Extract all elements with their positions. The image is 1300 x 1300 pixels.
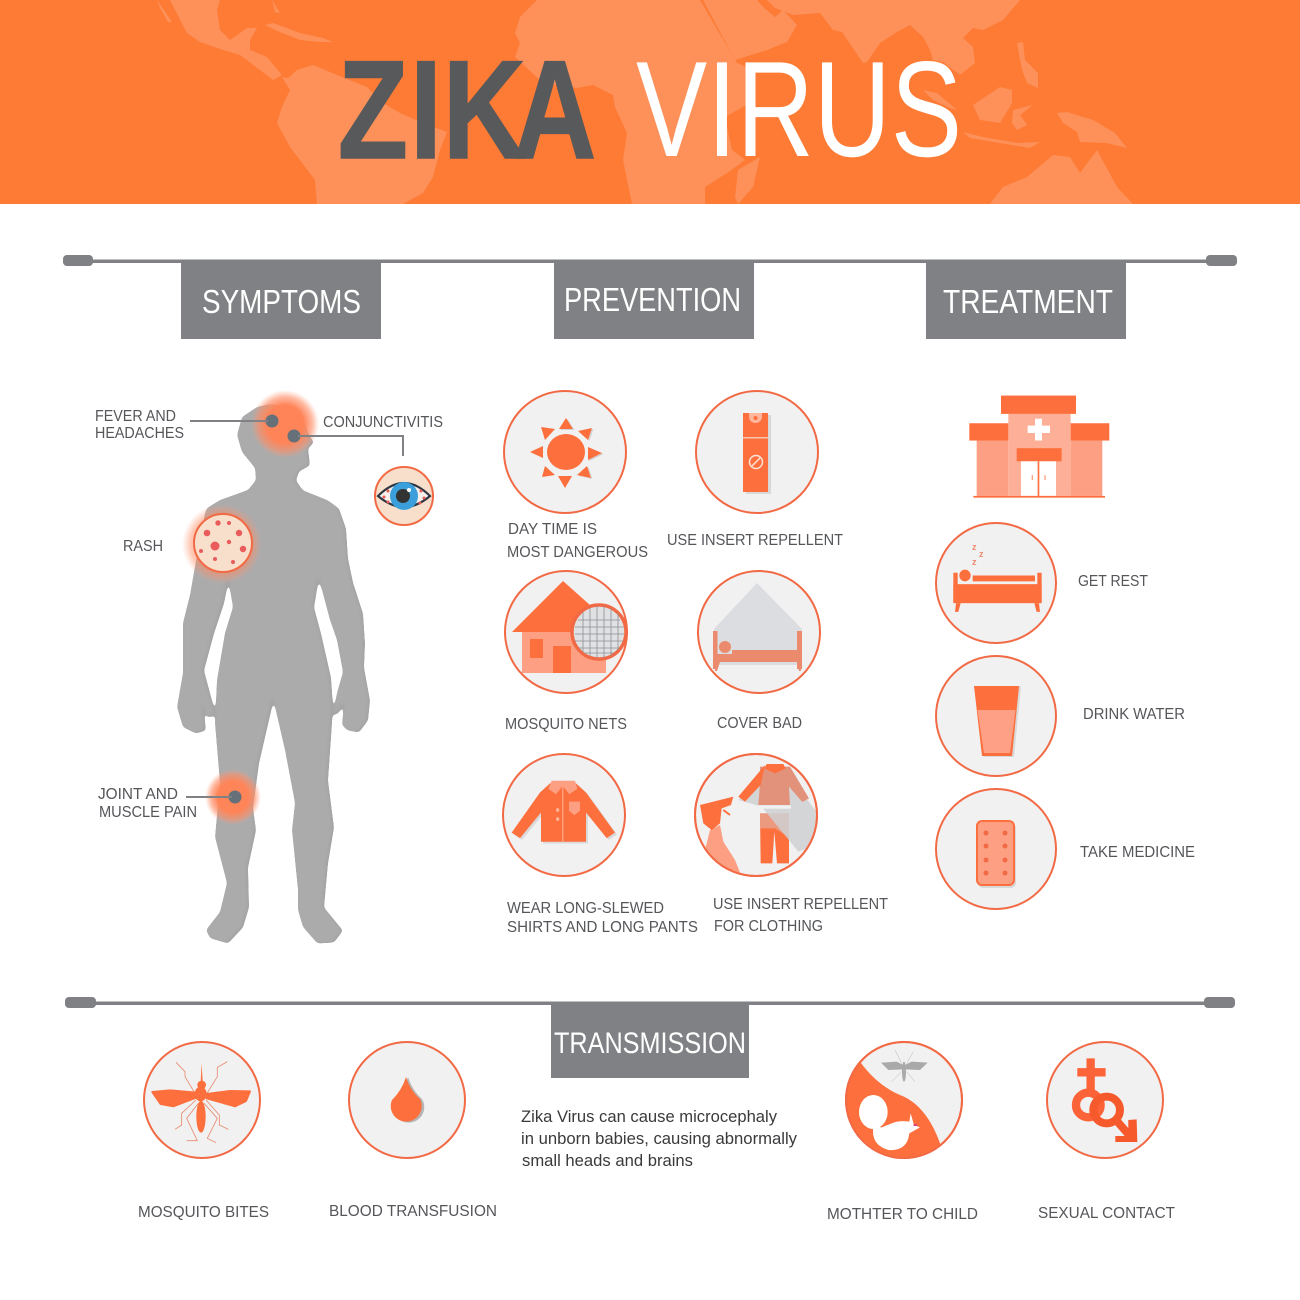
icon: sun [504, 391, 626, 513]
icon: bed rest: z [979, 549, 984, 559]
head pain glow [251, 390, 319, 458]
label: conjunctivitis: CONJUNCTIVITIS [323, 414, 443, 431]
icon: gender symbols [1047, 1042, 1163, 1158]
heading: treatment: TREATMENT [943, 283, 1113, 320]
top rail [63, 255, 1237, 266]
icon: eye [375, 467, 433, 525]
label: blood transfusion: BLOOD TRANSFUSION [329, 1203, 497, 1220]
label: fever and headaches [95, 408, 184, 442]
heading: symptoms: SYMPTOMS [202, 283, 361, 320]
label: day time: MOST DANGEROUS [507, 544, 648, 561]
label: day time [507, 521, 648, 561]
icon: long-sleeved shirt [503, 754, 625, 876]
label: fever and headaches: FEVER AND [95, 408, 176, 425]
label: wear long sleeves: WEAR LONG-SLEWED [507, 900, 664, 917]
icon: house with net [505, 571, 627, 693]
label: get rest: GET REST [1078, 573, 1148, 590]
label: fever and headaches: HEADACHES [95, 425, 184, 442]
bottom rail [65, 997, 1235, 1008]
title: ZIKA [338, 32, 596, 189]
label: sexual contact: SEXUAL CONTACT [1038, 1205, 1175, 1222]
label: repellent for clothing: USE INSERT REPELLENT [713, 896, 888, 913]
heading: treatment [926, 261, 1126, 339]
heading: prevention: PREVENTION [564, 281, 741, 318]
title [338, 32, 962, 189]
panel: symptoms [95, 390, 443, 944]
icon: hospital [969, 396, 1109, 498]
panel: prevention [503, 391, 888, 936]
panel: transmission [138, 1042, 1175, 1223]
icon: rash skin [182, 504, 262, 584]
label: joint and muscle pain [98, 786, 197, 821]
icon: repellent spray [696, 391, 818, 513]
label: rash: RASH [123, 538, 163, 555]
heading: symptoms [181, 261, 381, 339]
label: repellent for clothing [713, 896, 888, 935]
world map [157, 0, 1133, 204]
label: mother to child: MOTHTER TO CHILD [827, 1206, 978, 1223]
text: microcephaly note: small heads and brains [522, 1152, 693, 1170]
icon: mother to child [845, 1041, 963, 1159]
heading: prevention [554, 261, 754, 339]
label: joint and muscle pain: JOINT AND [98, 786, 178, 803]
label: wear long sleeves: SHIRTS AND LONG PANTS [507, 919, 698, 936]
label: drink water: DRINK WATER [1083, 706, 1185, 723]
knee pain glow [205, 769, 261, 825]
label: wear long sleeves [507, 900, 698, 936]
title: VIRUS [636, 33, 962, 185]
icon: blood drop [349, 1042, 465, 1158]
text: microcephaly note: Zika Virus can cause microcephaly [521, 1108, 778, 1126]
icon: spraying clothing [695, 754, 820, 877]
human body silhouette [177, 404, 370, 944]
heading: transmission [551, 1003, 749, 1078]
icon: bed rest: z [972, 557, 977, 567]
label: use insert repellent: USE INSERT REPELLENT [667, 532, 843, 549]
text: microcephaly note [521, 1108, 798, 1170]
icon: mosquito [144, 1042, 260, 1158]
icon: bed rest: z [972, 542, 977, 552]
label: take medicine: TAKE MEDICINE [1080, 844, 1195, 861]
icon: medicine blister [936, 789, 1056, 909]
icon: bed rest [936, 523, 1056, 643]
panel: treatment [936, 396, 1195, 909]
label: day time: DAY TIME IS [508, 521, 597, 538]
header banner [0, 0, 1300, 204]
callout dots and leader lines [186, 414, 403, 804]
icon: glass of water [936, 656, 1056, 776]
text: microcephaly note: in unborn babies, causing abnormally [521, 1130, 798, 1148]
icon: bed under net [698, 571, 820, 693]
label: joint and muscle pain: MUSCLE PAIN [99, 804, 197, 821]
label: mosquito nets: MOSQUITO NETS [505, 716, 627, 733]
label: repellent for clothing: FOR CLOTHING [714, 918, 823, 935]
label: mosquito bites: MOSQUITO BITES [138, 1204, 269, 1221]
heading: transmission: TRANSMISSION [554, 1027, 746, 1060]
label: cover bed: COVER BAD [717, 715, 802, 732]
